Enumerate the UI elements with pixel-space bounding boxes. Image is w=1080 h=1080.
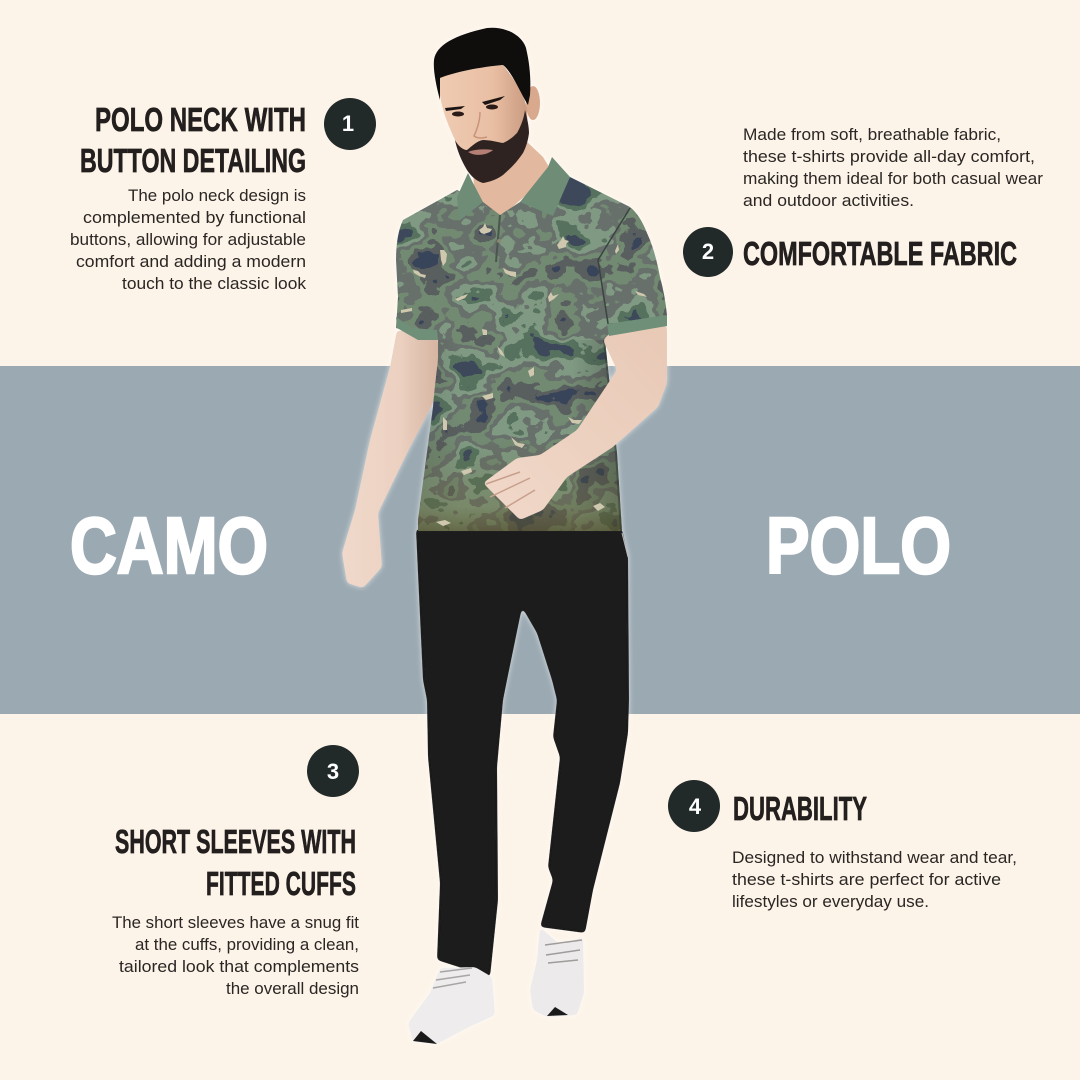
mouth	[468, 149, 493, 155]
description 1: buttons, allowing for adjustable	[70, 230, 306, 249]
description 2	[743, 125, 1043, 210]
camo light flecks	[401, 223, 647, 526]
heading 4: DURABILITY	[733, 790, 867, 827]
description 4: lifestyles or everyday use.	[732, 892, 929, 911]
description 3	[112, 913, 359, 998]
number badge 3: 3	[327, 759, 339, 784]
callout 1: polo neck	[70, 98, 376, 293]
number badge 1: 1	[342, 111, 354, 136]
description 4	[732, 848, 1017, 911]
heading 1: BUTTON DETAILING	[80, 142, 306, 179]
callout 2: comfortable fabric	[683, 125, 1043, 277]
neck	[473, 140, 552, 218]
word: POLO: POLO	[766, 501, 951, 590]
centre band	[0, 366, 1080, 714]
callout 4: durability	[668, 780, 1017, 911]
callout 3: short sleeves	[112, 745, 359, 998]
number badge 3	[307, 745, 359, 797]
number badge 1	[324, 98, 376, 150]
heading 3	[115, 823, 356, 902]
description 4: these t-shirts are perfect for active	[732, 870, 1001, 889]
sleeve seam shadows	[598, 208, 630, 336]
ear	[526, 86, 540, 120]
number badge 4	[668, 780, 720, 832]
right shoe	[530, 927, 584, 1017]
word: CAMO: CAMO	[70, 501, 268, 590]
description 3: The short sleeves have a snug fit	[112, 913, 359, 932]
description 1: touch to the classic look	[122, 274, 307, 293]
description 2: Made from soft, breathable fabric,	[743, 125, 1001, 144]
description 2: these t-shirts provide all-day comfort,	[743, 147, 1035, 166]
heading 1: POLO NECK WITH	[95, 101, 306, 138]
heading 3: FITTED CUFFS	[206, 865, 356, 902]
left shoe	[408, 967, 495, 1044]
right arm and hand	[483, 325, 667, 520]
collar	[457, 157, 570, 221]
number badge 2	[683, 227, 733, 277]
beard	[455, 110, 529, 183]
description 1: comfort and adding a modern	[76, 252, 306, 271]
description 1: complemented by functional	[83, 208, 306, 227]
description 3: tailored look that complements	[119, 957, 359, 976]
description 1: The polo neck design is	[128, 186, 306, 205]
left arm	[342, 330, 438, 588]
sleeve cuffs	[396, 315, 667, 340]
description 2: making them ideal for both casual wear	[743, 169, 1043, 188]
heading 1	[80, 101, 306, 179]
description 4: Designed to withstand wear and tear,	[732, 848, 1017, 867]
number badge 2: 2	[702, 239, 714, 264]
description 3: at the cuffs, providing a clean,	[135, 935, 359, 954]
description 2: and outdoor activities.	[743, 191, 914, 210]
hair	[434, 28, 530, 105]
polo shirt	[390, 170, 675, 535]
trousers	[416, 529, 629, 977]
number badge 4: 4	[689, 794, 702, 819]
eyes and brows	[445, 96, 505, 138]
face	[440, 65, 528, 183]
buttons	[497, 239, 501, 243]
heading 3: SHORT SLEEVES WITH	[115, 823, 356, 860]
description 1	[70, 186, 307, 293]
model figure	[342, 28, 675, 1044]
description 3: the overall design	[226, 979, 359, 998]
